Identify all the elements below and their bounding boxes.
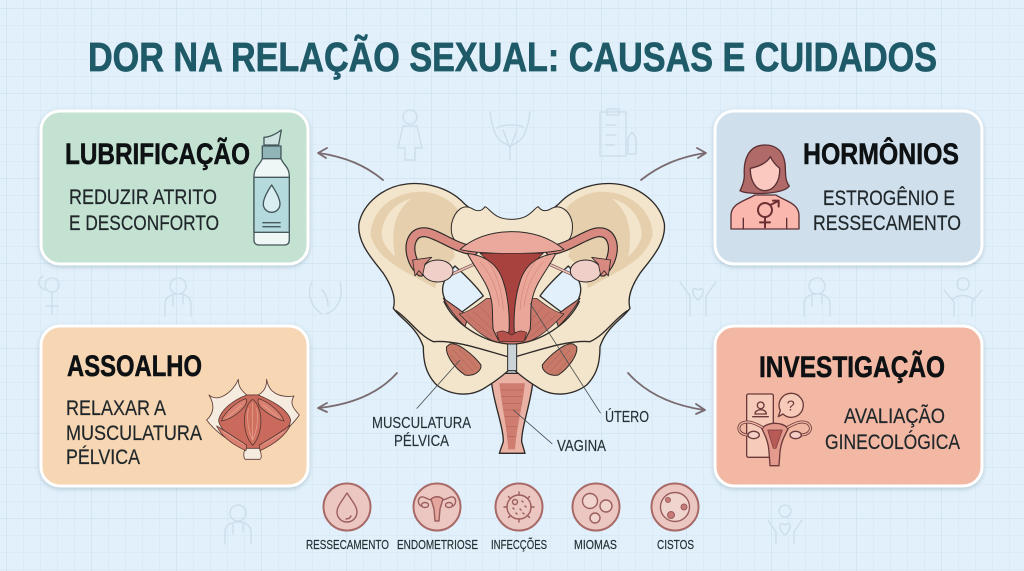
icon: virus xyxy=(496,484,542,530)
heading: lubrificação: LUBRIFICAÇÃO xyxy=(65,137,250,171)
left hip bone xyxy=(359,184,512,394)
text: reduzir atrito xyxy=(69,186,219,235)
cause: infecções: INFECÇÕES xyxy=(491,537,547,552)
icon: gynecological evaluation: ? xyxy=(787,399,795,415)
text: estrogênio: ESTROGÊNIO E xyxy=(823,187,955,210)
text: reduzir atrito: REDUZIR ATRITO xyxy=(69,186,217,209)
arrow: to assoalho xyxy=(318,373,397,412)
leader lines xyxy=(417,303,601,444)
heading: assoalho: ASSOALHO xyxy=(67,350,202,383)
cause: miomas: MIOMAS xyxy=(574,537,617,552)
arrow: to hormônios xyxy=(641,148,706,180)
icon: woman with gender symbol xyxy=(731,145,799,229)
cause: cistos: CISTOS xyxy=(657,537,694,552)
icon: cysts xyxy=(652,484,698,530)
text: relaxar: MUSCULATURA xyxy=(66,422,202,445)
cause: miomas xyxy=(572,484,620,552)
text: avaliação: AVALIAÇÃO xyxy=(844,404,945,428)
cause: endometriose xyxy=(397,484,478,552)
pelvis anatomy illustration xyxy=(359,184,665,453)
label: musculatura pélvica: MUSCULATURA xyxy=(372,415,471,432)
cause: ressecamento xyxy=(306,484,389,552)
sacrum xyxy=(451,207,572,247)
text: relaxar: RELAXAR A xyxy=(66,397,166,420)
pubic symphysis xyxy=(508,344,517,371)
pelvic floor muscle xyxy=(443,298,580,347)
panel: investigação xyxy=(715,326,982,486)
label: vagina: VAGINA xyxy=(557,438,606,455)
text: relaxar xyxy=(66,397,202,469)
text: relaxar: PÉLVICA xyxy=(66,446,140,469)
right pubic bar xyxy=(516,302,627,375)
cause: ressecamento: RESSECAMENTO xyxy=(306,537,389,552)
arrow: to lubrificação xyxy=(318,148,383,180)
arrow: to investigação xyxy=(628,373,705,414)
text: avaliação: GINECOLÓGICA xyxy=(825,431,960,454)
cause: infecções xyxy=(491,484,547,552)
label: musculatura pélvica: PÉLVICA xyxy=(394,431,449,450)
heading: investigação: INVESTIGAÇÃO xyxy=(759,350,945,384)
left pubic bar xyxy=(396,302,508,375)
panel: assoalho xyxy=(41,326,308,486)
cause: cistos xyxy=(652,484,698,552)
icon: gynecological evaluation xyxy=(739,393,810,466)
icon: drop xyxy=(324,484,370,530)
cause: endometriose: ENDOMETRIOSE xyxy=(397,537,478,552)
heading: hormônios: HORMÔNIOS xyxy=(803,137,959,171)
icon: lubricant bottle xyxy=(254,130,289,245)
vagina xyxy=(492,373,533,453)
faint background icons xyxy=(39,109,982,544)
panel: lubrificação xyxy=(41,111,308,264)
uterus xyxy=(410,232,613,342)
icon: pelvic floor muscles xyxy=(207,379,299,459)
panel: hormônios xyxy=(715,111,982,264)
text: reduzir atrito: E DESCONFORTO xyxy=(69,212,219,235)
text: avaliação xyxy=(825,404,960,454)
icon: uterus xyxy=(414,484,460,530)
icon: fibroids xyxy=(572,484,620,530)
label: útero: ÚTERO xyxy=(605,407,649,426)
right hip bone xyxy=(512,184,665,394)
label: musculatura pélvica xyxy=(372,415,471,450)
text: estrogênio xyxy=(813,187,961,235)
text: estrogênio: RESSECAMENTO xyxy=(813,212,961,235)
